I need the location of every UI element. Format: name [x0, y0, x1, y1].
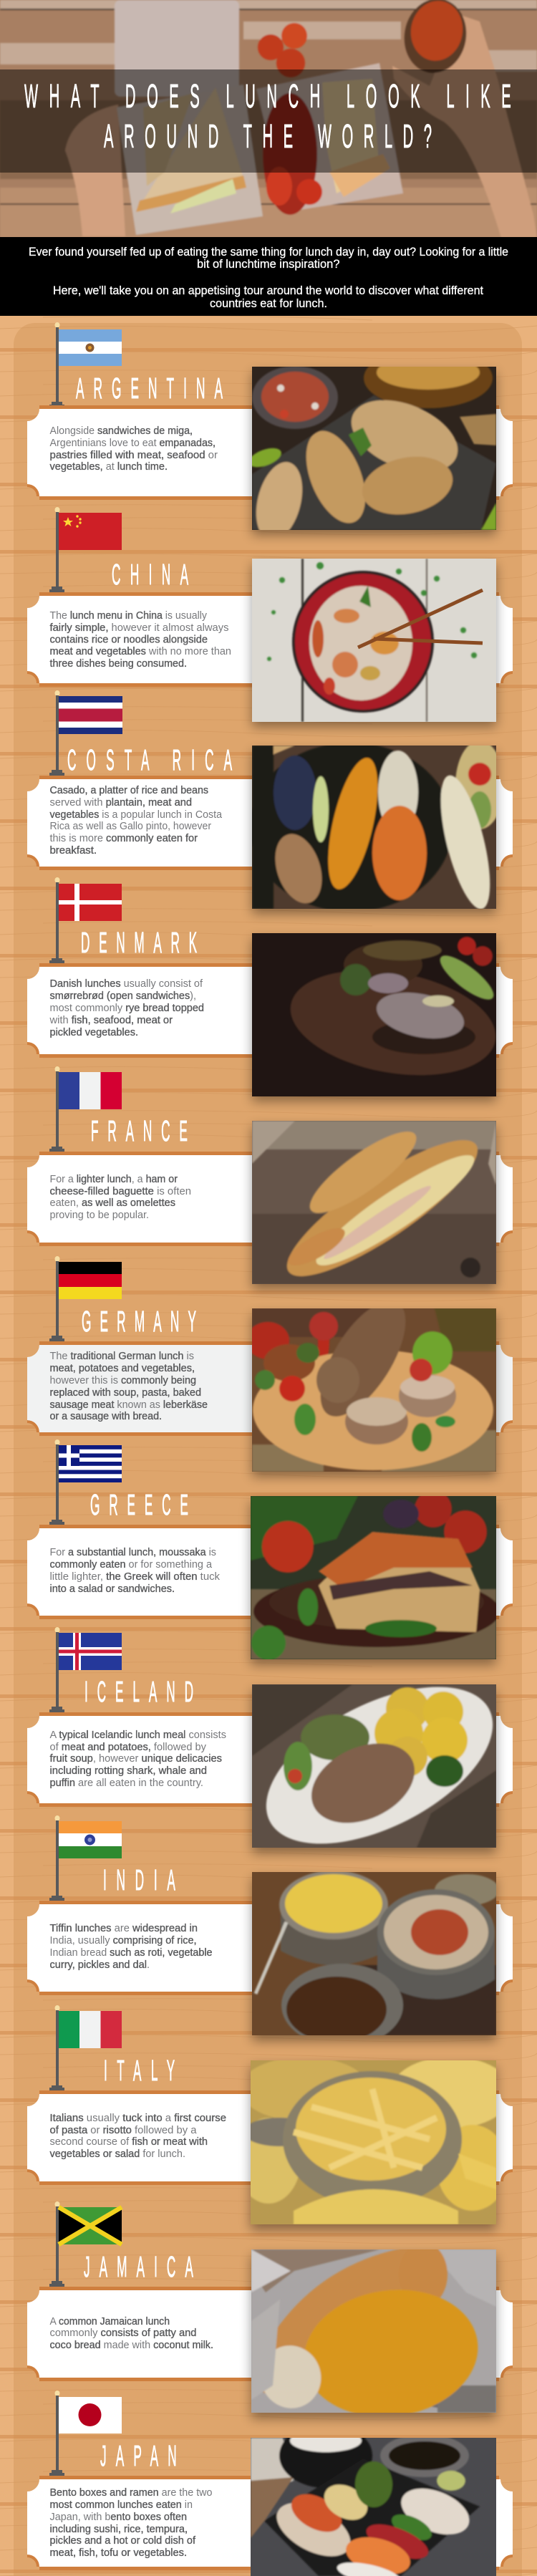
text: France: cheese-filled baguette is often — [50, 1186, 191, 1197]
text: China: The lunch menu in China is usually — [50, 610, 208, 622]
panel: Argentina — [27, 322, 513, 546]
panel: France — [27, 1066, 513, 1296]
card: France — [27, 1152, 513, 1246]
card: China — [27, 592, 513, 687]
panel: Italy — [27, 2005, 513, 2230]
text: Jamaica: coco bread made with coconut milk. — [50, 2340, 213, 2351]
text: Japan: meat, fish, tofu or vegetables. — [50, 2547, 187, 2559]
flag: Japan — [49, 2391, 122, 2476]
text: France: proving to be popular. — [50, 1210, 149, 1221]
panel: Jamaica — [27, 2201, 513, 2428]
text: Germany: The traditional German lunch is — [50, 1351, 194, 1362]
text: China: contains rice or noodles alongside — [50, 635, 208, 646]
text: Japan: Bento boxes and ramen are the two — [50, 2487, 212, 2499]
heading: Argentina: ARGENTINA — [76, 372, 223, 405]
title: WHAT DOES LUNCH LOOK LIKE — [24, 78, 511, 115]
intro text panel: bit of lunchtime inspiration? — [197, 258, 339, 271]
flag: Italy — [49, 2005, 122, 2090]
text: India — [50, 1923, 212, 1971]
flag: France — [49, 1066, 122, 1152]
flag: Jamaica — [49, 2201, 122, 2287]
text: Japan: most common lunches eaten in — [50, 2499, 193, 2511]
text: Italy: of pasta or risotto followed by a — [50, 2125, 197, 2136]
header photo: lunch box on wooden table — [0, 0, 537, 238]
text: Iceland: of meat and potatoes, followed by — [50, 1742, 207, 1753]
text: Argentina: Alongside sandwiches de miga, — [50, 425, 193, 437]
card: Greece — [27, 1525, 513, 1619]
flag: Greece — [49, 1439, 122, 1525]
heading: Japan: JAPAN — [100, 2439, 177, 2472]
text: Denmark: most commonly rye bread topped — [50, 1003, 204, 1014]
heading: Iceland: ICELAND — [84, 1675, 193, 1708]
card: Argentina — [27, 405, 513, 500]
text: Argentina: vegetables, at lunch time. — [50, 461, 168, 473]
text: Germany: however this is commonly being — [50, 1375, 196, 1386]
text: Greece — [50, 1547, 221, 1595]
photo: casado in skillet — [249, 741, 504, 914]
flag: Iceland — [49, 1627, 122, 1712]
text: Denmark: pickled vegetables. — [50, 1027, 138, 1038]
photo: sacks of pasta — [236, 2057, 512, 2230]
text: Costa Rica: vegetables is a popular lunch in Costa — [50, 809, 223, 821]
flag: China — [49, 507, 122, 592]
text: Japan — [50, 2487, 212, 2559]
panel: Greece — [27, 1439, 513, 1665]
text: Germany: replaced with soup, pasta, baked — [50, 1387, 201, 1399]
card: India — [27, 1901, 513, 1995]
text: Argentina: Argentinians love to eat empanadas, — [50, 438, 216, 449]
text: Italy: second course of fish or meat with — [50, 2136, 208, 2148]
heading: Greece: GREECE — [90, 1488, 188, 1521]
card: Jamaica — [27, 2287, 513, 2381]
text: India: Indian bread such as roti, vegetable — [50, 1947, 212, 1959]
flag: India — [49, 1815, 122, 1901]
text: Germany — [50, 1351, 208, 1422]
panel: China — [27, 507, 513, 727]
heading: Denmark: DENMARK — [81, 926, 197, 959]
card: Denmark — [27, 963, 513, 1058]
card: Germany — [27, 1341, 513, 1436]
text: Germany: or a sausage with bread. — [50, 1411, 162, 1422]
text: India: Tiffin lunches are widespread in — [50, 1923, 198, 1934]
intro text panel: Here, we'll take you on an appetising tour around the world to discover what different — [53, 284, 483, 297]
text: Jamaica: commonly consists of patty and — [50, 2327, 196, 2339]
card: Japan — [27, 2476, 513, 2570]
photo: empanadas — [246, 348, 496, 546]
text: Costa Rica: served with plantain, meat and — [50, 797, 192, 809]
text: Argentina: pastries filled with meat, seafood or — [50, 450, 218, 461]
text: Greece: little lighter, the Greek will often tuck — [50, 1571, 221, 1583]
intro text panel: Ever found yourself fed up of eating the same thing for lunch day in, day out? Looking for a little — [29, 246, 508, 259]
text: Greece: into a salad or sandwiches. — [50, 1583, 175, 1595]
photo: tiffin boxes — [252, 1871, 499, 2047]
text: Costa Rica: breakfast. — [50, 845, 97, 857]
panel: Japan — [27, 2391, 513, 2576]
flag: Argentina — [49, 322, 122, 407]
heading: China: CHINA — [112, 558, 188, 591]
card: Costa Rica — [27, 776, 513, 870]
panel: Iceland — [27, 1627, 517, 1876]
text: China: three dishes being consumed. — [50, 658, 187, 670]
text: India: curry, pickles and dal. — [50, 1959, 150, 1971]
text: Japan: Japan, with bento boxes often — [50, 2512, 187, 2523]
text: China: meat and vegetables with no more than — [50, 646, 231, 657]
panel: Germany — [27, 1256, 513, 1477]
heading: Italy: ITALY — [104, 2054, 175, 2087]
text: Iceland: including rotting shark, whale and — [50, 1765, 207, 1777]
text: Denmark: with fish, seafood, meat or — [49, 1015, 173, 1026]
text: Germany: sausage meat known as leberkäse — [50, 1399, 208, 1411]
heading: France: FRANCE — [91, 1114, 188, 1147]
text: Italy: Italians usually tuck into a first course — [50, 2113, 226, 2124]
text: Denmark — [49, 978, 204, 1038]
text: Greece: commonly eaten or for something a — [50, 1559, 213, 1571]
card: Italy — [27, 2090, 513, 2185]
flag: Costa Rica — [49, 690, 122, 776]
text: Italy — [50, 2113, 226, 2160]
text: Iceland — [50, 1730, 226, 1789]
text: Costa Rica — [50, 785, 223, 857]
heading: India: INDIA — [103, 1863, 175, 1896]
intro text panel: countries eat for lunch. — [210, 297, 327, 310]
photo: bento box — [251, 2438, 496, 2576]
panel: Costa Rica — [27, 690, 513, 914]
text: Japan: including sushi, rice, tempura, — [50, 2524, 188, 2535]
text: France: For a lighter lunch, a ham or — [50, 1174, 178, 1185]
text: Iceland: fruit soup, however unique delicacies — [50, 1753, 222, 1765]
text: Jamaica — [50, 2316, 213, 2351]
photo: moussaka — [251, 1490, 500, 1665]
text: India: India, usually comprising of rice, — [50, 1935, 196, 1947]
heading: Germany: GERMANY — [82, 1305, 196, 1338]
flag: Denmark — [49, 877, 122, 963]
photo: patty and coco bread — [251, 2242, 496, 2428]
photo: smorrebrod — [252, 933, 504, 1101]
text: Jamaica: A common Jamaican lunch — [50, 2316, 170, 2327]
text: Denmark: smørrebrød (open sandwiches), — [50, 990, 196, 1002]
text: Japan: pickles and a hot or cold dish of — [50, 2535, 196, 2547]
photo: meat and potatoes — [242, 1654, 517, 1876]
title: AROUND THE WORLD? — [104, 118, 432, 155]
text: Costa Rica: Rica as well as Gallo pinto, however — [50, 821, 211, 832]
intro text panel — [0, 237, 537, 316]
card: Iceland — [27, 1712, 513, 1807]
text: Greece: For a substantial lunch, moussaka is — [50, 1547, 216, 1558]
panel: Denmark — [27, 877, 513, 1101]
title — [24, 78, 511, 155]
text: Costa Rica: this is more commonly eaten for — [50, 833, 198, 844]
panel: India — [27, 1815, 513, 2047]
text: France — [50, 1174, 191, 1221]
text: Iceland: puffin are all eaten in the country. — [50, 1777, 203, 1789]
heading: Costa Rica: COSTA RICA — [67, 743, 232, 776]
text: France: eaten, as well as omelettes — [50, 1197, 175, 1209]
text: Italy: vegetables or salad for lunch. — [50, 2148, 185, 2160]
text: China: fairly simple, however it almost always — [50, 622, 229, 634]
heading: Jamaica: JAMAICA — [84, 2250, 193, 2283]
text: Iceland: A typical Icelandic lunch meal consists — [50, 1730, 226, 1741]
text: Denmark: Danish lunches usually consist of — [50, 978, 203, 990]
text: Costa Rica: Casado, a platter of rice and beans — [50, 785, 208, 796]
text: Germany: meat, potatoes and vegetables, — [50, 1363, 195, 1374]
photo: baguette — [252, 1119, 496, 1296]
text: China — [50, 610, 231, 670]
flag: Germany — [49, 1256, 122, 1341]
photo: meatloaf roll — [246, 1288, 496, 1477]
photo: noodle bowl — [252, 559, 496, 727]
text: Argentina — [50, 425, 218, 473]
